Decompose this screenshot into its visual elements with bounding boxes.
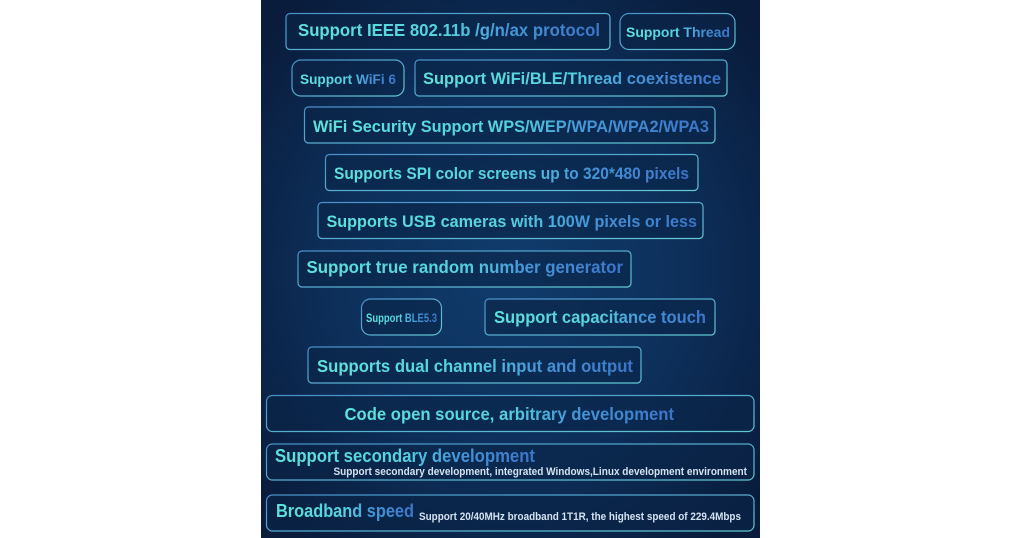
feature: open source <box>266 396 754 432</box>
feature: secondary development: Support secondary development, integrated Windows,Linux development environment <box>334 466 747 478</box>
feature: WiFi security <box>304 107 715 143</box>
feature: SPI screens <box>326 154 698 190</box>
feature: secondary development: Support secondary development <box>275 446 535 466</box>
feature: random number generator <box>298 251 631 287</box>
feature: coexistence: Support WiFi/BLE/Thread coexistence <box>423 69 721 88</box>
feature: BLE5.3: Support BLE5.3 <box>366 311 437 325</box>
feature: Thread: Support Thread <box>626 24 730 40</box>
feature: coexistence <box>415 60 727 96</box>
feature: SPI screens: Supports SPI color screens up to 320*480 pixels <box>334 164 689 183</box>
feature: WiFi 6 <box>292 60 404 96</box>
feature: capacitance touch: Support capacitance touch <box>494 307 706 327</box>
feature: BLE5.3 <box>362 299 442 335</box>
feature: secondary development <box>266 444 754 480</box>
feature: IEEE protocol: Support IEEE 802.11b /g/n/ax protocol <box>298 20 600 40</box>
feature: USB cameras: Supports USB cameras with 100W pixels or less <box>326 212 697 231</box>
feature: Thread <box>620 14 735 50</box>
feature: broadband speed: Support 20/40MHz broadband 1T1R, the highest speed of 229.4Mbps <box>419 511 741 523</box>
feature: random number generator: Support true random number generator <box>306 257 623 277</box>
feature: IEEE protocol <box>286 14 610 50</box>
background panel <box>261 0 760 538</box>
feature: open source: Code open source, arbitrary development <box>344 404 674 424</box>
feature: USB cameras <box>318 202 703 238</box>
feature: broadband speed <box>266 495 754 531</box>
feature: WiFi security: WiFi Security Support WPS/WEP/WPA/WPA2/WPA3 <box>313 117 709 136</box>
feature: dual channel <box>308 347 641 383</box>
feature: WiFi 6: Support WiFi 6 <box>300 72 396 87</box>
feature: dual channel: Supports dual channel input and output <box>317 356 633 376</box>
feature: broadband speed: Broadband speed <box>276 501 414 521</box>
feature: capacitance touch <box>485 299 715 335</box>
